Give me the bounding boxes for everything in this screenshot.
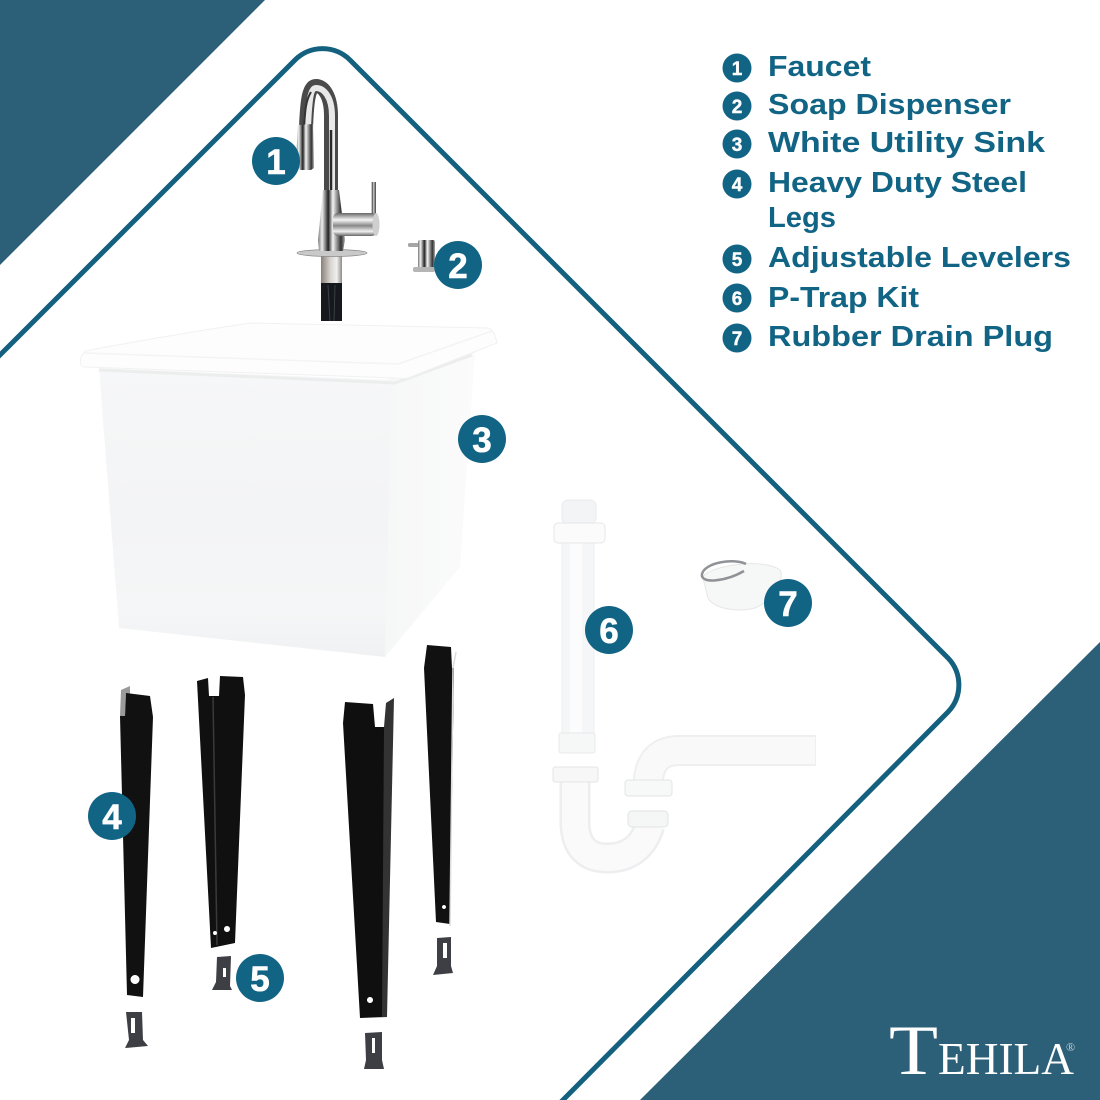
soap dispenser — [408, 240, 435, 272]
p-trap kit — [553, 500, 816, 858]
faucet shank — [321, 256, 342, 283]
legend item 2: Soap Dispenser — [768, 89, 1011, 121]
sink front face — [99, 368, 392, 657]
rim shadow — [99, 355, 472, 383]
legend item 5: Adjustable Levelers — [768, 242, 1071, 274]
leveler, second — [212, 956, 232, 990]
parts legend — [722, 51, 1071, 353]
background corner triangle: top left — [0, 0, 265, 265]
legend item 4: Heavy Duty Steel — [768, 167, 1027, 199]
leg, right — [424, 645, 456, 926]
j-bend — [553, 767, 668, 858]
legend item 1 — [722, 51, 872, 83]
leg, left — [120, 686, 153, 997]
badge 6: 6 — [599, 612, 619, 651]
tailpiece tube — [554, 500, 605, 753]
badge 4: 4 — [102, 798, 122, 837]
Tehila logo: EHILA — [938, 1033, 1074, 1084]
faucet body — [318, 190, 345, 251]
legend item 4: Legs — [768, 202, 836, 234]
leg, second — [197, 676, 245, 948]
badge 1 — [252, 137, 300, 185]
badge 3: 3 — [472, 421, 492, 460]
faucet deck plate — [297, 250, 367, 256]
badge 6 — [585, 606, 633, 654]
badge 3 — [458, 415, 506, 463]
badge 2: 2 — [448, 247, 468, 286]
badge 5 — [236, 954, 284, 1002]
badge 2 — [434, 241, 482, 289]
leveler, left — [125, 1012, 148, 1048]
faucet hoses — [321, 280, 342, 321]
faucet gooseneck — [304, 86, 332, 196]
legend item 6: 6 — [732, 289, 742, 310]
legend item 7: 7 — [732, 329, 742, 350]
legend item 3: White Utility Sink — [768, 127, 1045, 159]
badge 7: 7 — [778, 585, 798, 624]
leg, third — [343, 698, 394, 1018]
faucet handle — [333, 182, 380, 236]
adjustable levelers — [125, 937, 453, 1069]
legend item 5: 5 — [732, 250, 743, 271]
steel legs — [120, 645, 456, 1018]
leveler, third — [364, 1032, 384, 1069]
rubber drain plug — [702, 561, 781, 610]
number badges — [88, 137, 812, 1002]
leveler, right — [433, 937, 453, 975]
sink side face — [385, 352, 475, 657]
white utility sink — [80, 323, 497, 657]
legend item 6: P-Trap Kit — [768, 282, 920, 314]
trap arm — [625, 750, 816, 796]
Tehila logo — [889, 1012, 1075, 1090]
rim crease — [84, 331, 492, 364]
Tehila logo: ® — [1066, 1040, 1075, 1054]
badge 1: 1 — [266, 143, 286, 182]
legend item 4: 4 — [732, 175, 743, 196]
faucet — [296, 86, 380, 321]
legend item 6 — [722, 282, 920, 314]
legend item 3: 3 — [732, 135, 742, 156]
badge 4 — [88, 792, 136, 840]
legend item 7: Rubber Drain Plug — [768, 321, 1053, 353]
legend item 2: 2 — [732, 97, 742, 118]
faucet spray head — [296, 124, 314, 170]
legend item 4 — [722, 167, 1027, 234]
legend item 1: Faucet — [768, 51, 872, 83]
background corner triangle: bottom right — [640, 642, 1100, 1100]
sink rim — [80, 323, 497, 378]
Tehila logo: T — [889, 1012, 938, 1090]
badge 5: 5 — [250, 960, 270, 999]
badge 7 — [764, 579, 812, 627]
legend item 1: 1 — [732, 59, 743, 80]
